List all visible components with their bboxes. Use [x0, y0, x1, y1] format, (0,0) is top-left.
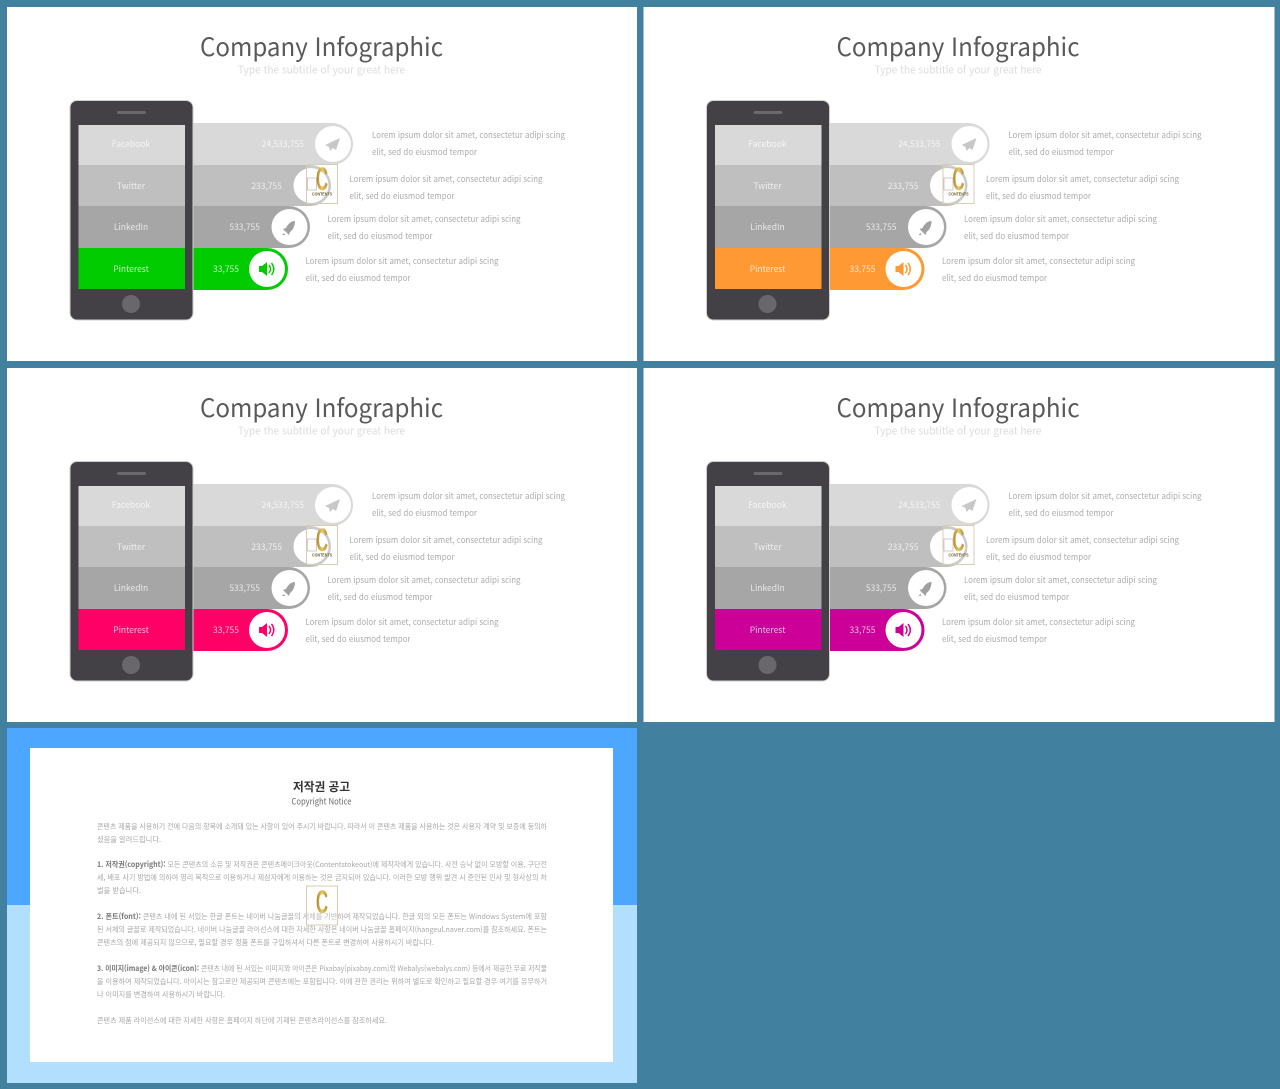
- icon: speaker: [896, 262, 910, 276]
- bar: Pinterest: 33,755: [213, 624, 239, 636]
- bar: LinkedIn: 533,755: [229, 221, 260, 233]
- intro text: 셨음을 알려드립니다.: [97, 834, 161, 845]
- descriptions: elit, sed do eiusmod tempor: [306, 633, 411, 645]
- watermark: C: [316, 522, 328, 558]
- intro text: 콘텐츠 제품을 사용하기 전에 다음의 항목에 소개돼 있는 사항이 있어 주시기 바랍니다. 따라서 이 콘텐츠 제품을 사용하는 것은 사용자 계약 및 보증에 동의하: [97, 821, 547, 832]
- descriptions: Lorem ipsum dolor sit amet, consectetur adipi scing: [350, 173, 543, 185]
- title: Company Infographic: [836, 28, 1080, 64]
- bar: Pinterest: 33,755: [850, 624, 876, 636]
- descriptions: elit, sed do eiusmod tempor: [964, 591, 1070, 603]
- descriptions: [942, 129, 1202, 284]
- watermark: CONTENTS: [948, 552, 968, 558]
- phone: Facebook: [748, 499, 787, 511]
- descriptions: Lorem ipsum dolor sit amet, consectetur adipi scing: [306, 255, 499, 267]
- icon: rocket: [282, 221, 295, 235]
- watermark: [306, 161, 338, 204]
- phone: Pinterest: [113, 263, 150, 275]
- bar: Pinterest: [830, 609, 924, 651]
- panel: slide 3 pink: [7, 368, 637, 722]
- section: image and icon: 3. 이미지(image) & 아이콘(icon): 콘텐츠 내에 된 서있는 이미지와 아이콘은 Pixabay(pixabay.com)와 Webalys(webalys.com) 등에서 제공한 무료 저작물: [97, 963, 547, 974]
- watermark: CONTENTS: [948, 192, 968, 196]
- phone: LinkedIn: [750, 582, 785, 594]
- descriptions: Lorem ipsum dolor sit amet, consectetur adipi scing: [1008, 129, 1202, 141]
- bar: Pinterest: 33,755: [850, 263, 876, 275]
- phone: Pinterest: [113, 624, 150, 636]
- panel: slide 1 green: [7, 7, 637, 361]
- bar: Facebook: [193, 484, 353, 526]
- descriptions: elit, sed do eiusmod tempor: [986, 551, 1092, 563]
- panel: slide 2 orange: [644, 7, 1274, 361]
- icon: speaker: [259, 262, 274, 276]
- bar: Twitter: [193, 165, 331, 206]
- bar: LinkedIn: [830, 567, 946, 609]
- descriptions: Lorem ipsum dolor sit amet, consectetur adipi scing: [942, 255, 1135, 267]
- phone: Twitter: [117, 180, 146, 192]
- descriptions: elit, sed do eiusmod tempor: [328, 230, 433, 242]
- phone: LinkedIn: [750, 221, 785, 233]
- descriptions: Lorem ipsum dolor sit amet, consectetur adipi scing: [964, 213, 1157, 225]
- section: font: [97, 911, 547, 948]
- descriptions: Lorem ipsum dolor sit amet, consectetur adipi scing: [986, 173, 1179, 185]
- phone: Twitter: [753, 180, 782, 192]
- descriptions: Lorem ipsum dolor sit amet, consectetur adipi scing: [942, 616, 1135, 628]
- bar: Pinterest: [193, 609, 288, 651]
- icon: rocket: [282, 582, 295, 596]
- phone: LinkedIn: [114, 221, 148, 233]
- descriptions: elit, sed do eiusmod tempor: [964, 230, 1070, 242]
- descriptions: Lorem ipsum dolor sit amet, consectetur adipi scing: [350, 534, 543, 546]
- descriptions: Lorem ipsum dolor sit amet, consectetur adipi scing: [372, 490, 565, 502]
- descriptions: Lorem ipsum dolor sit amet, consectetur adipi scing: [1008, 490, 1202, 502]
- phone: [70, 100, 193, 320]
- phone: Pinterest: [750, 624, 786, 636]
- descriptions: Lorem ipsum dolor sit amet, consectetur adipi scing: [986, 534, 1179, 546]
- bar: Facebook: [830, 123, 990, 165]
- bar: Pinterest: [193, 248, 288, 290]
- phone: [706, 462, 830, 681]
- section: image and icon: 을 이용하여 제작되었습니다. 아이시는 참고로만 제공되며 콘텐츠에는 포함됩니다. 이에 관한 권리는 위하여 별도로 확인하고 필요할 경우 여기를 유무하거: [97, 976, 547, 987]
- phone: Twitter: [753, 541, 782, 553]
- descriptions: Lorem ipsum dolor sit amet, consectetur adipi scing: [328, 213, 521, 225]
- descriptions: elit, sed do eiusmod tempor: [1008, 146, 1114, 158]
- descriptions: Lorem ipsum dolor sit amet, consectetur adipi scing: [372, 129, 565, 141]
- section: font: 된 서체의 글꼴로 제작되었습니다. 네이버 나눔글꼴 라이선스에 대한 자세한 사항은 네이버 나눔글꼴 홈페이지(hangeul.naver.com)를 참조하세요. 폰트는: [97, 924, 547, 935]
- icon: paper plane: [962, 499, 976, 512]
- bar: Facebook: [193, 123, 353, 165]
- subtitle: Type the subtitle of your great here: [238, 62, 405, 78]
- section: font: 콘텐츠의 첨에 제공되지 않으므로, 필요할 경우 정품 폰트를 구입하셔서 다른 폰트로 변경하여 사용하시기 바랍니다.: [97, 937, 434, 948]
- bar: Twitter: [830, 526, 968, 567]
- descriptions: elit, sed do eiusmod tempor: [372, 507, 478, 519]
- watermark: [943, 522, 974, 564]
- bar: Twitter: 233,755: [251, 180, 282, 192]
- descriptions: Lorem ipsum dolor sit amet, consectetur adipi scing: [328, 574, 521, 586]
- section: font: 2. 폰트(font): 콘텐츠 내에 된 서있는 한글 폰트는 네이버 나눔글꼴의 서체를 기반하여 제작되었습니다. 한글 외의 모든 폰트는 Windows System에 포함: [97, 911, 547, 922]
- bar: Pinterest: [830, 248, 924, 290]
- watermark: C: [952, 522, 964, 558]
- bar: LinkedIn: 533,755: [866, 582, 897, 594]
- phone: Pinterest: [750, 263, 786, 275]
- watermark: [306, 522, 338, 564]
- descriptions: [942, 490, 1202, 645]
- watermark: CONTENTS: [312, 192, 332, 196]
- bar: LinkedIn: [193, 206, 310, 248]
- phone: LinkedIn: [114, 582, 148, 594]
- icon: paper plane: [962, 138, 976, 151]
- icon: rocket: [918, 582, 932, 596]
- phone: [706, 100, 830, 320]
- bar: Facebook: 24,533,755: [262, 499, 304, 511]
- watermark: C: [316, 161, 328, 197]
- subtitle: Type the subtitle of your great here: [238, 424, 405, 438]
- bar: Facebook: [830, 484, 990, 526]
- bar: Twitter: 233,755: [888, 180, 919, 192]
- descriptions: elit, sed do eiusmod tempor: [1008, 507, 1114, 519]
- bar: Pinterest: 33,755: [213, 263, 239, 275]
- bar: Facebook: 24,533,755: [898, 138, 941, 150]
- phone: Facebook: [112, 499, 150, 511]
- bar: Facebook: 24,533,755: [262, 138, 304, 150]
- descriptions: elit, sed do eiusmod tempor: [350, 190, 455, 202]
- phone: Facebook: [112, 138, 150, 150]
- copyright heading: 저작권 공고: [293, 778, 350, 795]
- section: image and icon: 나 이미지를 변경하여 사용하시기 바랍니다.: [97, 989, 225, 1000]
- icon: speaker: [896, 623, 910, 637]
- panel: slide 4 magenta: [644, 368, 1274, 722]
- icon: speaker: [259, 623, 274, 637]
- descriptions: elit, sed do eiusmod tempor: [306, 272, 411, 284]
- copyright subheading: Copyright Notice: [292, 796, 352, 808]
- bar: Twitter: 233,755: [251, 541, 282, 553]
- descriptions: elit, sed do eiusmod tempor: [942, 633, 1048, 645]
- descriptions: Lorem ipsum dolor sit amet, consectetur adipi scing: [306, 616, 499, 628]
- bar: Twitter: 233,755: [888, 541, 919, 553]
- title: Company Infographic: [836, 389, 1080, 425]
- descriptions: elit, sed do eiusmod tempor: [328, 591, 433, 603]
- phone: Facebook: [748, 138, 787, 150]
- bar: LinkedIn: 533,755: [229, 582, 260, 594]
- descriptions: [306, 129, 565, 284]
- icon: paper plane: [325, 499, 340, 512]
- intro text: [97, 821, 547, 845]
- bar: LinkedIn: [830, 206, 946, 248]
- section: image and icon: [97, 963, 547, 1000]
- subtitle: Type the subtitle of your great here: [874, 62, 1042, 78]
- icon: paper plane: [325, 138, 340, 151]
- descriptions: elit, sed do eiusmod tempor: [942, 272, 1048, 284]
- panel: copyright notice: [7, 728, 637, 1083]
- license note: 콘텐츠 제품 라이선스에 대한 자세한 사항은 홈페이지 하단에 기재된 콘텐츠라이선스를 참조하세요.: [97, 1015, 387, 1026]
- watermark: C: [316, 884, 328, 920]
- descriptions: [306, 490, 565, 645]
- phone: Twitter: [117, 541, 146, 553]
- watermark: C: [952, 161, 964, 197]
- section: copyright: 세, 배포 사기 방법에 의하여 영리 목적으로 이용하거나 제삼자에게 이용하는 것은 금지되어 있습니다. 이러한 모방 행위 발견 시 준인된 민사 및 형사상의 처: [97, 872, 547, 883]
- bar: Facebook: 24,533,755: [898, 499, 941, 511]
- watermark: [943, 161, 974, 204]
- bar: Twitter: [830, 165, 968, 206]
- section: copyright: 벌을 받습니다.: [97, 885, 141, 896]
- descriptions: elit, sed do eiusmod tempor: [986, 190, 1092, 202]
- watermark: CONTENTS: [312, 552, 332, 558]
- phone: [70, 462, 193, 681]
- section: copyright: [97, 859, 547, 896]
- title: Company Infographic: [200, 389, 443, 425]
- watermark: [306, 884, 338, 925]
- descriptions: Lorem ipsum dolor sit amet, consectetur adipi scing: [964, 574, 1157, 586]
- title: Company Infographic: [200, 28, 443, 64]
- descriptions: elit, sed do eiusmod tempor: [372, 146, 478, 158]
- descriptions: elit, sed do eiusmod tempor: [350, 551, 455, 563]
- bar: Twitter: [193, 526, 331, 567]
- bar: LinkedIn: [193, 567, 310, 609]
- icon: rocket: [918, 221, 932, 235]
- subtitle: Type the subtitle of your great here: [874, 424, 1042, 438]
- section: copyright: 1. 저작권(copyright): 모든 콘텐츠의 소유 및 저작권은 콘텐츠메이크아웃(Contentstokeout)에 제작자에게 있습니다. 사전 승낙 없이 모방할 이용, 구단전: [97, 859, 547, 870]
- bar: LinkedIn: 533,755: [866, 221, 897, 233]
